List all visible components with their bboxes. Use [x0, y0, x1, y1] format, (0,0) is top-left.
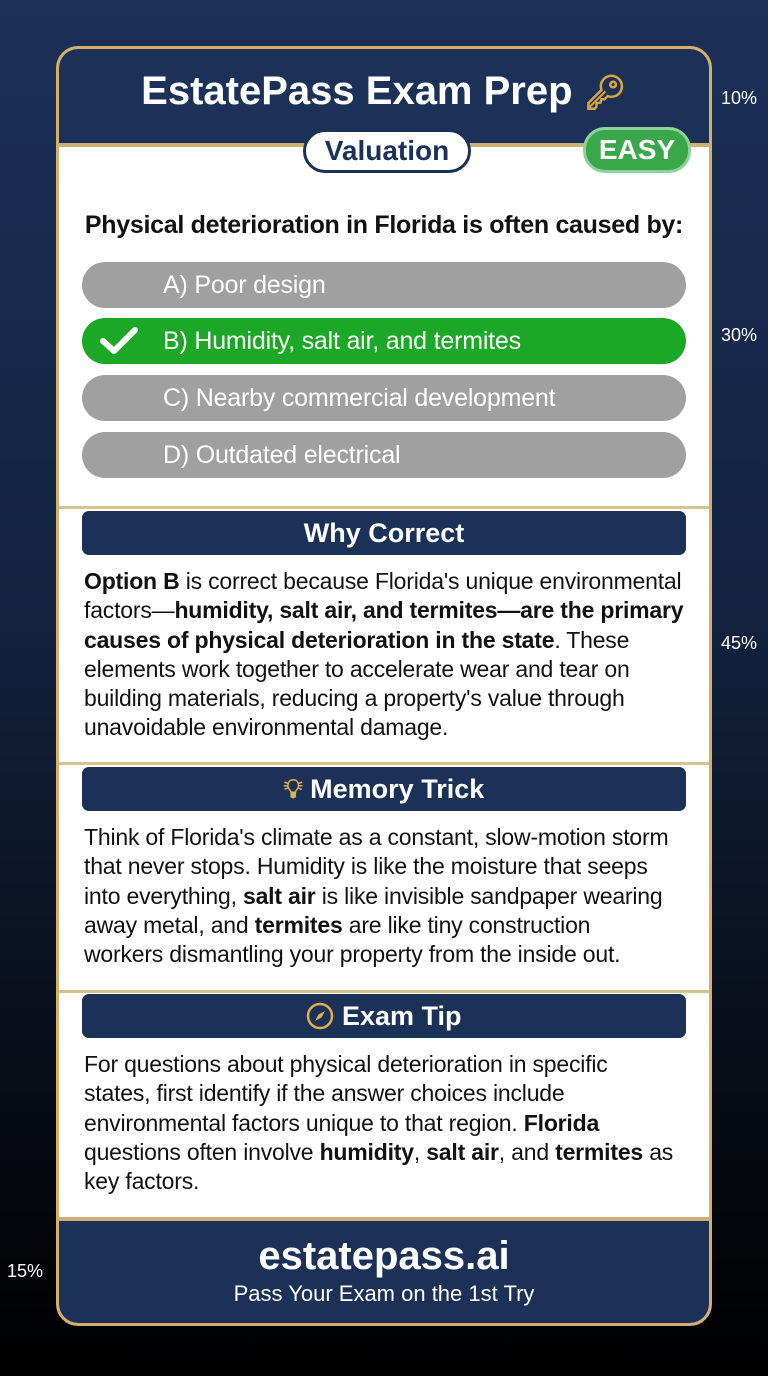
- badge: EASY: [583, 127, 691, 173]
- option D: D) Outdated electrical: [163, 441, 400, 469]
- heading: Exam Tip: [82, 994, 686, 1038]
- title: EstatePass Exam Prep 🔑︎: [141, 69, 627, 113]
- header: [59, 49, 709, 147]
- badge: Valuation: [303, 129, 471, 173]
- label: 45%: 45%: [721, 633, 757, 653]
- brand: estatepass.ai: [258, 1234, 510, 1278]
- text: exam tip: For questions about physical deterioration in specific: [84, 1051, 608, 1077]
- text: exam tip: states, first identify if the answer choices include: [84, 1080, 564, 1106]
- badge: EASY: EASY: [599, 134, 675, 165]
- label: 10%: 10%: [721, 88, 757, 108]
- text: memory trick: away metal, and termites are like tiny construction: [84, 912, 590, 938]
- footer: [59, 1217, 709, 1323]
- heading: Why Correct: Why Correct: [304, 518, 464, 548]
- badge: Valuation: Valuation: [325, 135, 449, 166]
- text: why correct: elements work together to accelerate wear and tear on: [84, 656, 630, 682]
- text: exam tip: [84, 1051, 673, 1194]
- text: exam tip: key factors.: [84, 1168, 199, 1194]
- heading: Why Correct: [82, 511, 686, 555]
- option B correct: [82, 318, 686, 364]
- heading: Exam Tip: Exam Tip: [342, 1001, 462, 1031]
- text: memory trick: into everything, salt air is like invisible sandpaper wearing: [84, 883, 662, 909]
- icon: compass: [306, 1002, 334, 1030]
- text: exam tip: environmental factors unique to that region. Florida: [84, 1110, 599, 1136]
- option C: C) Nearby commercial development: [163, 384, 555, 412]
- text: why correct: building materials, reducing a property's value through: [84, 685, 625, 711]
- label: 15%: 15%: [7, 1261, 43, 1281]
- option B correct: B) Humidity, salt air, and termites: [163, 327, 521, 355]
- option A: [82, 262, 686, 308]
- icon: check: [100, 327, 138, 354]
- text: why correct: [84, 568, 684, 740]
- text: memory trick: that never stops. Humidity is like the moisture that seeps: [84, 853, 648, 879]
- option C: [82, 375, 686, 421]
- text: memory trick: Think of Florida's climate as a constant, slow-motion storm: [84, 824, 668, 850]
- text: why correct: causes of physical deterioration in the state. These: [84, 627, 629, 653]
- text: why correct: factors—humidity, salt air, and termites—are the primary: [84, 597, 683, 623]
- heading: Memory Trick: [82, 767, 686, 811]
- text: memory trick: [84, 824, 668, 967]
- text: memory trick: workers dismantling your property from the inside out.: [84, 941, 620, 967]
- question: Physical deterioration in Florida is often caused by:: [85, 211, 683, 239]
- text: why correct: unavoidable environmental damage.: [84, 714, 448, 740]
- tagline: Pass Your Exam on the 1st Try: [234, 1281, 534, 1306]
- option A: A) Poor design: [163, 271, 326, 299]
- heading: Memory Trick: 💡︎ Memory Trick: [284, 774, 484, 804]
- text: exam tip: questions often involve humidity, salt air, and termites as: [84, 1139, 673, 1165]
- label: 30%: 30%: [721, 325, 757, 345]
- text: why correct: Option B is correct because Florida's unique environmental: [84, 568, 681, 594]
- option D: [82, 432, 686, 478]
- card: [56, 46, 712, 1326]
